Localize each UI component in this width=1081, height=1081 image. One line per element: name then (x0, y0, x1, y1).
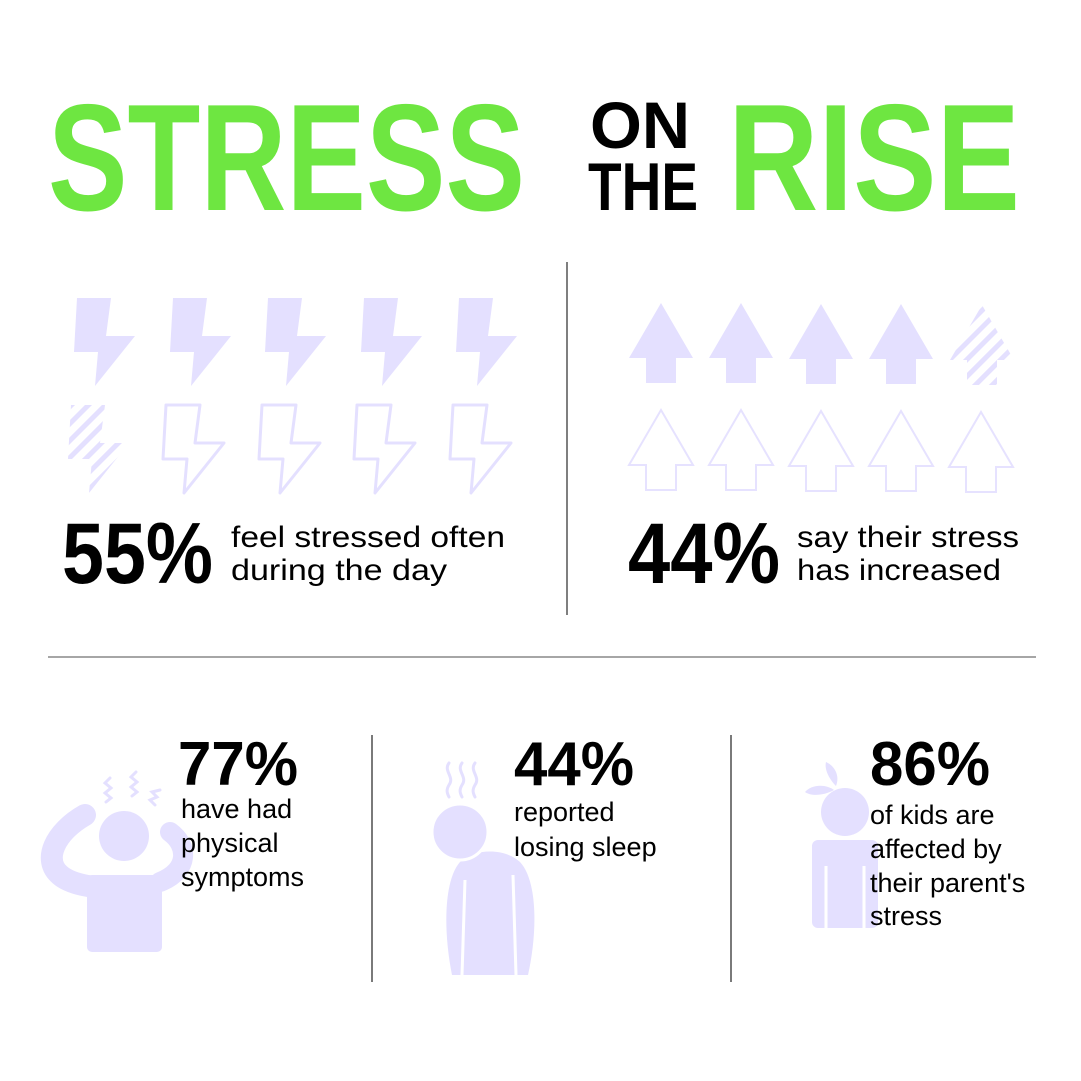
stat 55%: 55% (62, 506, 213, 602)
panel: stressed often (62, 298, 517, 602)
stat 77%: physical (181, 828, 279, 858)
stat 86%: stress (870, 901, 942, 931)
panel: kids affected (805, 730, 1025, 931)
icon: child (805, 762, 878, 928)
stat 44% sleep: reported (514, 797, 615, 827)
icon grid: lightning bolts (68, 298, 517, 493)
stat 55%: feel stressed often (231, 521, 505, 554)
title: RISE (728, 73, 1020, 243)
title: THE (588, 149, 698, 225)
stat 86%: their parent's (870, 868, 1025, 898)
stat 44% (628, 506, 1019, 602)
stat 55%: during the day (231, 554, 447, 587)
stat 77%: symptoms (181, 862, 304, 892)
stat 44% sleep: 44% (514, 730, 634, 799)
stat 77%: have had (181, 794, 292, 824)
panel: stress increased (628, 303, 1019, 602)
stat 77% (178, 730, 304, 892)
title: ON (590, 88, 690, 162)
stat 44% sleep (514, 730, 657, 862)
stat 55% (62, 506, 505, 602)
icon: stressed person (52, 772, 183, 952)
stat 44% sleep: losing sleep (514, 832, 657, 862)
title: STRESS (48, 73, 525, 243)
stat 86%: affected by (870, 834, 1002, 864)
title (48, 73, 1020, 243)
stat 86%: 86% (870, 730, 990, 799)
panel: physical symptoms (52, 730, 304, 952)
stat 44%: 44% (628, 506, 780, 602)
icon grid: arrows (629, 303, 1014, 492)
stat 44%: has increased (797, 554, 1001, 587)
icon: tired person (432, 763, 534, 975)
stat 86%: of kids are (870, 800, 995, 830)
stat 44%: say their stress (797, 521, 1019, 554)
stat 86% (870, 730, 1025, 931)
panel: losing sleep (432, 730, 657, 975)
stat 77%: 77% (178, 730, 298, 799)
